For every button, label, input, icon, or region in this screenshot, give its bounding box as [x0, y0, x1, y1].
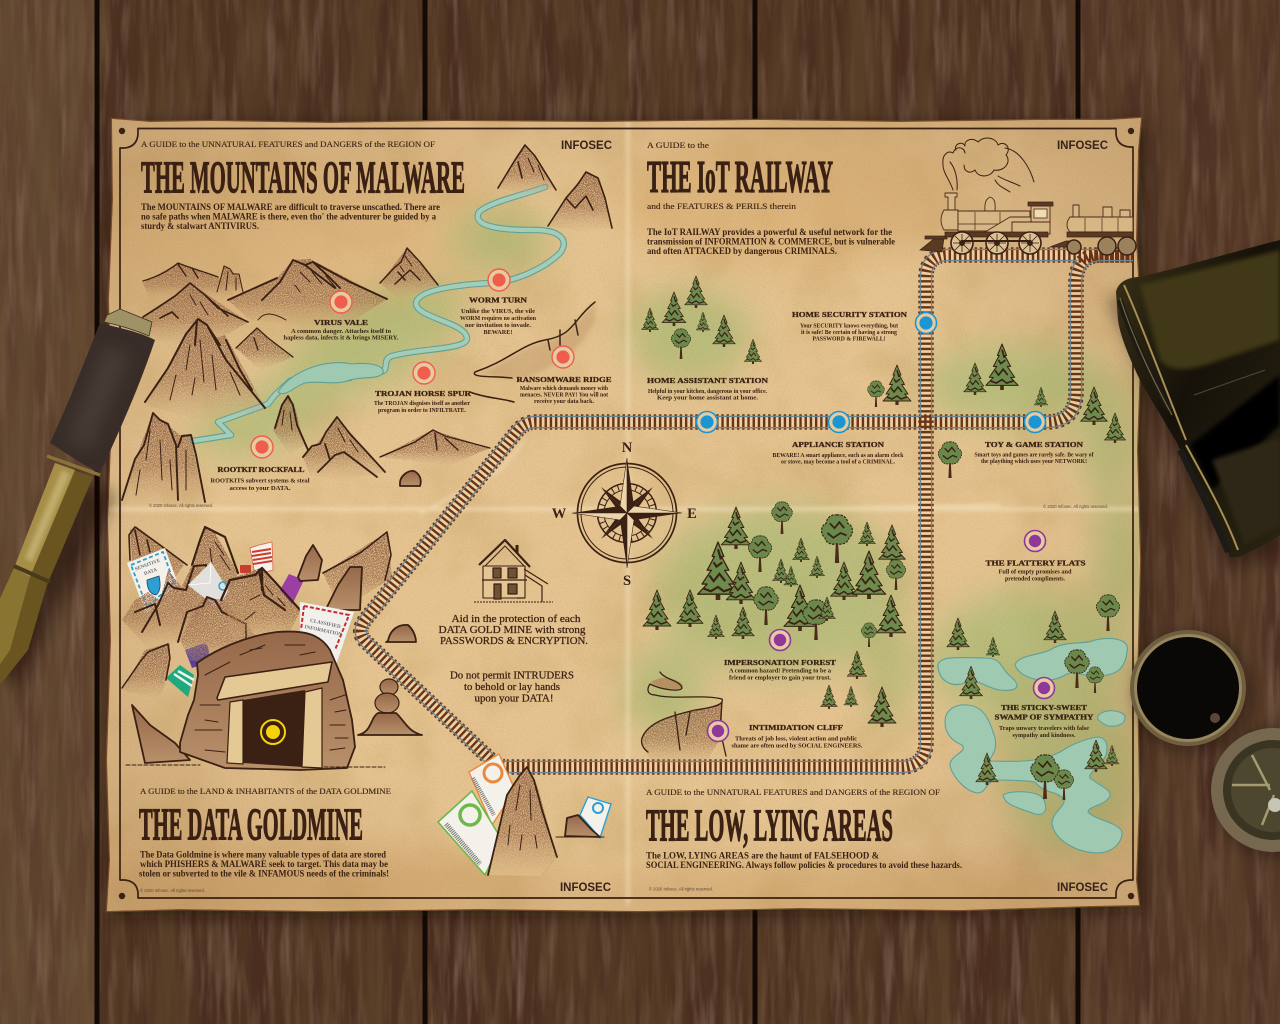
label: ransomware ridge: RANSOMWARE RIDGE [516, 375, 612, 384]
envelope [188, 562, 229, 607]
section: low lying areas heading: A GUIDE to the UNNATURAL FEATURES and DANGERS of the REGION OF [646, 787, 940, 797]
label: intimidation cliff: shame are often used by SOCIAL ENGINEERS. [732, 742, 863, 749]
label: appliance station [772, 440, 904, 466]
smoke [943, 138, 1034, 192]
prop: brass telescope [0, 309, 155, 690]
center advice text: upon your DATA! [474, 694, 554, 704]
label: sticky-sweet swamp: sympathy and kindness. [1012, 732, 1076, 739]
label: intimidation cliff [732, 723, 863, 749]
section: mountains of malware heading: sturdy & stalwart ANTIVIRUS. [141, 221, 259, 231]
section: data goldmine heading: stolen or subverted to the vile & INFAMOUS needs of the criminals! [139, 868, 389, 878]
label: home security station: Your SECURITY knows everything, but [800, 322, 899, 330]
label: home security station [792, 310, 908, 342]
prop: binoculars [1108, 240, 1280, 565]
section: mountains of malware heading: THE MOUNTAINS OF MALWARE [141, 152, 465, 202]
sensitive data card: DATA [144, 568, 158, 577]
label: home security station: it is safe! Be certain of having a strong [801, 329, 898, 336]
parchment paper sheet [90, 110, 1150, 920]
compass letters: S [623, 573, 631, 589]
section: data goldmine heading: which PHISHERS & MALWARE seek to target. This data may be [140, 859, 388, 869]
section: iot railway heading: transmission of INFORMATION & COMMERCE, but is vulnerable [647, 237, 895, 247]
label: sticky-sweet swamp: SWAMP OF SYMPATHY [994, 712, 1094, 722]
classified information document: CLASSIFIED [309, 618, 341, 630]
intimidation cliff [642, 672, 726, 765]
compass letters [552, 440, 697, 589]
section: iot railway heading: © 2020 Infosec. All rights reserved. [1043, 504, 1108, 509]
center advice text [438, 614, 588, 704]
violet card [185, 643, 210, 668]
impersonation forest [643, 502, 906, 727]
label: rootkit rockfall: ROOTKIT ROCKFALL [218, 465, 304, 474]
label: virus vale: hapless data, infects it & brings MISERY. [284, 335, 399, 342]
label: rootkit rockfall [210, 465, 310, 492]
label: worm turn [460, 296, 537, 336]
data goldmine entrance [126, 632, 385, 770]
lintel [217, 662, 332, 700]
label: impersonation forest [724, 658, 836, 682]
swamp trees [947, 595, 1120, 800]
section: iot railway heading: and often ATTACKED by dangerous CRIMINALS. [647, 246, 837, 256]
section: data goldmine heading: A GUIDE to the LAND & INHABITANTS of the DATA GOLDMINE [140, 786, 391, 796]
label: sticky-sweet swamp: THE STICKY-SWEET [1001, 703, 1087, 712]
section: data goldmine heading [139, 786, 611, 894]
purple markers [708, 530, 1054, 742]
mountains of malware [122, 145, 612, 503]
train [920, 138, 1136, 255]
label: ransomware ridge: menaces. NEVER PAY! You will not [520, 392, 609, 398]
purple card [280, 574, 304, 605]
label: toy and game station: TOY & GAME STATION [985, 440, 1084, 449]
section: iot railway heading: A GUIDE to the [647, 140, 709, 150]
gold marker [261, 720, 285, 744]
section: mountains of malware heading: INFOSEC [561, 140, 612, 152]
label: ransomware ridge [516, 375, 612, 405]
classified information document [300, 602, 354, 665]
label: toy and game station: Smart toys and games are rarely safe. Be wary of [974, 452, 1094, 459]
red markers [251, 269, 574, 458]
section: mountains of malware heading: no safe paths when MALWARE is there, even tho' the adventurer be guided by a [141, 212, 436, 222]
railway track [361, 255, 1133, 767]
location markers [251, 269, 1054, 744]
label: trojan horse spur: The TROJAN disguises itself as another [374, 400, 470, 407]
label: home assistant station [647, 376, 769, 402]
section: mountains of malware heading: © 2020 Infosec. All rights reserved. [149, 503, 213, 508]
center advice text: to behold or lay hands [464, 682, 560, 693]
id cards and peak beside the goldmine heading [438, 754, 611, 875]
label: trojan horse spur: program in order to INFILTRATE. [378, 407, 466, 414]
label: home assistant station: Keep your home assistant at home. [657, 394, 758, 402]
label: impersonation forest: IMPERSONATION FOREST [724, 658, 836, 667]
label: virus vale: VIRUS VALE [314, 318, 368, 327]
label: worm turn: nor invitation to invade. [465, 322, 531, 329]
label: worm turn: Unlike the VIRUS, the vile [461, 308, 535, 315]
prop: open compass case [1130, 630, 1280, 855]
label: flattery flats: THE FLATTERY FLATS [986, 559, 1086, 568]
section: low lying areas heading: The LOW, LYING AREAS are the haunt of FALSEHOOD & [646, 850, 879, 860]
section: low lying areas heading [646, 787, 1108, 894]
door [243, 690, 305, 767]
section: low lying areas heading: © 2020 Infosec. All rights reserved. [649, 886, 713, 892]
swamp lakes [938, 638, 1127, 853]
label: flattery flats: Full of empty promises and [998, 568, 1072, 575]
torn paper edges [107, 118, 1141, 911]
label: worm turn: BEWARE! [484, 329, 512, 336]
sensitive data card [127, 548, 178, 614]
decorative map frame [119, 128, 1134, 899]
section: low lying areas heading: INFOSEC [1057, 882, 1108, 894]
label: home assistant station: HOME ASSISTANT STATION [647, 376, 769, 385]
section: mountains of malware heading: A GUIDE to the UNNATURAL FEATURES and DANGERS of the REGION OF [141, 139, 435, 149]
label: rootkit rockfall: ROOTKITS subvert systems & steal [210, 478, 310, 485]
section: iot railway heading: INFOSEC [1057, 140, 1108, 152]
label: intimidation cliff: INTIMIDATION CLIFF [749, 723, 843, 732]
iot forest top [642, 276, 1126, 478]
section: low lying areas heading: THE LOW, LYING AREAS [646, 800, 893, 850]
label: rootkit rockfall: access to your DATA. [230, 485, 291, 492]
winding river [193, 187, 564, 441]
compass letters: W [552, 506, 567, 522]
label: toy and game station [974, 440, 1094, 465]
center advice text: DATA GOLD MINE with strong [438, 625, 586, 636]
section: data goldmine heading: The Data Goldmine is where many valuable types of data are stored [140, 850, 386, 860]
section: mountains of malware heading [141, 139, 612, 508]
section: iot railway heading: and the FEATURES & PERILS therein [647, 201, 797, 211]
data documents behind the mine mountains [127, 526, 304, 697]
cairn and boulders [358, 625, 422, 735]
label: sticky-sweet swamp [994, 703, 1094, 739]
label: appliance station: or stove, may become a tool of a CRIMINAL. [781, 459, 895, 466]
compass letters: E [687, 506, 697, 522]
center advice text: Aid in the protection of each [452, 614, 581, 625]
section: iot railway heading: The IoT RAILWAY provides a powerful & useful network for the [647, 227, 892, 237]
label: flattery flats [986, 559, 1086, 582]
paper folds [108, 120, 1140, 905]
label: home assistant station: Helpful in your kitchen, dangerous in your office. [648, 388, 767, 395]
label: trojan horse spur [374, 389, 472, 414]
label: ransomware ridge: receive your data back. [534, 398, 594, 405]
engine one [945, 193, 957, 211]
label: ransomware ridge: Malware which demands money with [520, 385, 608, 392]
section: iot railway heading [647, 140, 1108, 509]
label: virus vale [284, 318, 399, 342]
section: data goldmine heading: INFOSEC [560, 882, 611, 894]
center advice text: PASSWORDS & ENCRYPTION. [440, 636, 588, 647]
section: iot railway heading: THE IoT RAILWAY [647, 151, 833, 202]
tall peak on data goldmine [488, 767, 604, 880]
label: trojan horse spur: TROJAN HORSE SPUR [375, 389, 472, 398]
green card [166, 665, 194, 697]
label: flattery flats: pretended compliments. [1005, 575, 1065, 582]
blue markers [696, 312, 1046, 432]
classified information document: INFORMATION [304, 624, 343, 638]
label: worm turn: WORM requires no activation [460, 315, 537, 322]
label: impersonation forest: A common hazard! Pretending to be a [729, 668, 831, 674]
section: low lying areas heading: SOCIAL ENGINEERING. Always follow policies & procedures to avoid these hazards. [646, 860, 962, 870]
label: home security station: PASSWORD & FIREWALL! [812, 336, 886, 342]
label: appliance station: BEWARE! A smart appliance, such as an alarm clock [772, 452, 904, 459]
compass letters: N [622, 440, 633, 456]
sensitive data card: SENSITIVE [134, 558, 162, 572]
section: data goldmine heading: © 2020 Infosec. All rights reserved. [140, 888, 205, 893]
label: toy and game station: the plaything which uses your NETWORK! [981, 458, 1087, 465]
engine two [1073, 205, 1079, 217]
section: mountains of malware heading: The MOUNTAINS OF MALWARE are difficult to traverse unscathed. There are [141, 202, 440, 212]
label: appliance station: APPLIANCE STATION [792, 440, 885, 449]
label: home security station: HOME SECURITY STATION [792, 310, 908, 319]
label: intimidation cliff: Threats of job loss, violent action and public [735, 736, 857, 743]
house [474, 540, 553, 602]
powerpoint document [240, 542, 273, 575]
label: impersonation forest: friend or employer to gain your trust. [729, 674, 831, 682]
data goldmine mountains [122, 527, 392, 763]
ransomware ridge cliff [470, 302, 595, 402]
section: data goldmine heading: THE DATA GOLDMINE [139, 798, 363, 850]
compass rose [572, 458, 682, 568]
label: worm turn: WORM TURN [469, 296, 528, 304]
label: sticky-sweet swamp: Traps unwary travelers with false [999, 725, 1089, 732]
center advice text: Do not permit INTRUDERS [450, 670, 574, 682]
green map patches [184, 210, 1145, 855]
label: virus vale: A common danger. Attaches itself to [291, 328, 391, 335]
